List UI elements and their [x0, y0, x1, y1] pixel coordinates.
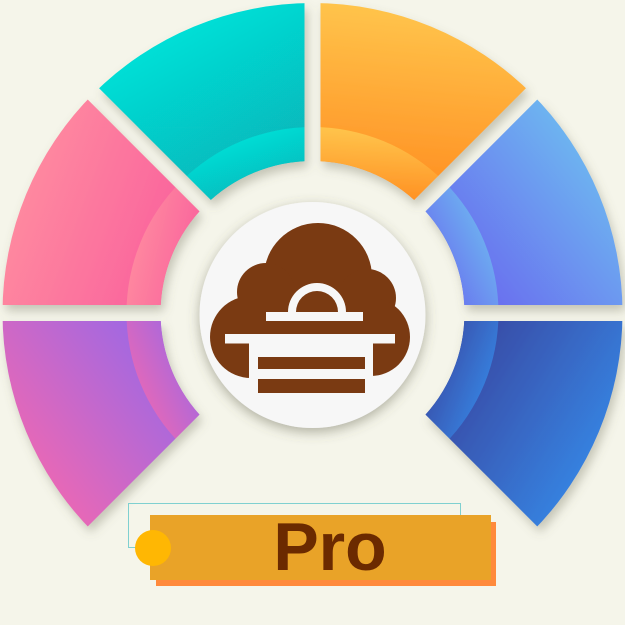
- label: Pro: Pro: [273, 509, 387, 585]
- segment: left lower: [2, 313, 205, 532]
- segment: orange: [312, 3, 532, 206]
- segment: left upper: [2, 94, 205, 313]
- segment: right lower: [420, 313, 622, 532]
- center circle: [200, 202, 426, 428]
- icon: cloud printer: [210, 223, 410, 396]
- segment: teal: [93, 3, 312, 206]
- label: Pro: [128, 504, 496, 586]
- segment: right upper: [420, 94, 622, 313]
